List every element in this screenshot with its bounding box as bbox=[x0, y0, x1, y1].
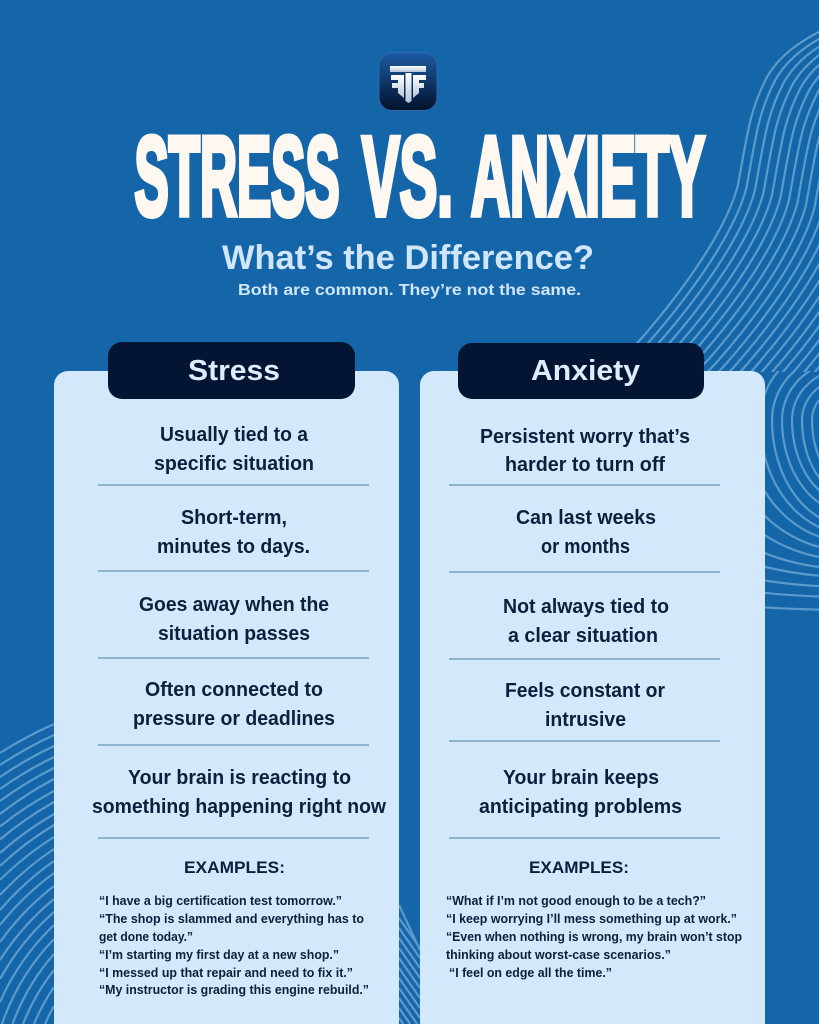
stress point 3 bbox=[139, 594, 329, 645]
anxiety point 3: a clear situation bbox=[508, 625, 658, 647]
decorative contour lines: bottom left bbox=[0, 724, 54, 1024]
stress header pill: Stress bbox=[188, 355, 280, 387]
stress header pill bbox=[108, 342, 355, 399]
subtitle heading: What’s the Difference? bbox=[222, 239, 594, 277]
anxiety card background bbox=[420, 371, 765, 1024]
stress point 1 bbox=[154, 424, 314, 475]
stress point 2: minutes to days. bbox=[157, 536, 310, 558]
stress examples list: “I have a big certification test tomorrow.” bbox=[99, 894, 342, 908]
anxiety point 4: Feels constant or bbox=[505, 680, 665, 702]
anxiety point 4 bbox=[505, 680, 665, 731]
anxiety point 4: intrusive bbox=[545, 709, 626, 731]
anxiety point 1: Persistent worry that’s bbox=[480, 426, 690, 448]
anxiety point 5 bbox=[479, 767, 682, 818]
stress examples list: get done today.” bbox=[99, 930, 193, 944]
title: VS. bbox=[362, 114, 453, 239]
stress point 3: Goes away when the bbox=[139, 594, 329, 616]
stress point 5 bbox=[92, 767, 386, 818]
decorative contour lines: right edge bbox=[765, 371, 819, 611]
panel: stress bbox=[54, 342, 399, 1024]
anxiety examples heading: EXAMPLES: bbox=[529, 858, 629, 877]
stress point 4: pressure or deadlines bbox=[133, 708, 335, 730]
anxiety examples list: “I feel on edge all the time.” bbox=[449, 966, 612, 980]
stress point 2: Short-term, bbox=[181, 507, 287, 529]
anxiety point 2: Can last weeks bbox=[516, 507, 656, 529]
panel: anxiety bbox=[420, 343, 765, 1024]
anxiety point 1 bbox=[480, 426, 690, 476]
anxiety point 5: Your brain keeps bbox=[503, 767, 659, 789]
anxiety point 3: Not always tied to bbox=[503, 596, 669, 618]
anxiety point 2: or months bbox=[541, 536, 630, 558]
anxiety examples list: “Even when nothing is wrong, my brain won’t stop bbox=[446, 930, 742, 944]
stress examples heading: EXAMPLES: bbox=[184, 858, 285, 877]
stress point 4 bbox=[133, 679, 335, 730]
title: STRESS bbox=[134, 114, 340, 239]
stress examples list: “I messed up that repair and need to fix it.” bbox=[99, 966, 353, 980]
anxiety examples list: “I keep worrying I’ll mess something up at work.” bbox=[446, 912, 737, 926]
anxiety examples list: “What if I’m not good enough to be a tech?” bbox=[446, 894, 706, 908]
tagline: Both are common. They’re not the same. bbox=[238, 282, 581, 299]
stress point 2 bbox=[157, 507, 310, 558]
stress point 5: Your brain is reacting to bbox=[128, 767, 351, 789]
stress point 3: situation passes bbox=[158, 623, 310, 645]
decorative contour lines: centre gap bbox=[399, 905, 420, 1024]
stress examples list: “My instructor is grading this engine rebuild.” bbox=[99, 983, 369, 997]
anxiety header pill bbox=[458, 343, 704, 399]
anxiety point 2 bbox=[516, 507, 656, 558]
decorative contour lines: top right bbox=[636, 30, 819, 372]
icon: logo bbox=[379, 52, 437, 110]
anxiety point 5: anticipating problems bbox=[479, 796, 682, 818]
anxiety examples list: thinking about worst-case scenarios.” bbox=[446, 948, 671, 962]
stress point 1: Usually tied to a bbox=[160, 424, 309, 446]
anxiety header pill: Anxiety bbox=[531, 355, 640, 387]
stress point 5: something happening right now bbox=[92, 796, 386, 818]
anxiety point 1: harder to turn off bbox=[505, 454, 665, 476]
anxiety examples list bbox=[446, 894, 742, 980]
stress examples list: “I’m starting my first day at a new shop.” bbox=[99, 948, 339, 962]
stress card background bbox=[54, 371, 399, 1024]
stress point 4: Often connected to bbox=[145, 679, 323, 701]
anxiety point 3 bbox=[503, 596, 669, 647]
stress examples list: “The shop is slammed and everything has to bbox=[99, 912, 364, 926]
stress point 1: specific situation bbox=[154, 453, 314, 475]
stress examples list bbox=[99, 894, 369, 997]
